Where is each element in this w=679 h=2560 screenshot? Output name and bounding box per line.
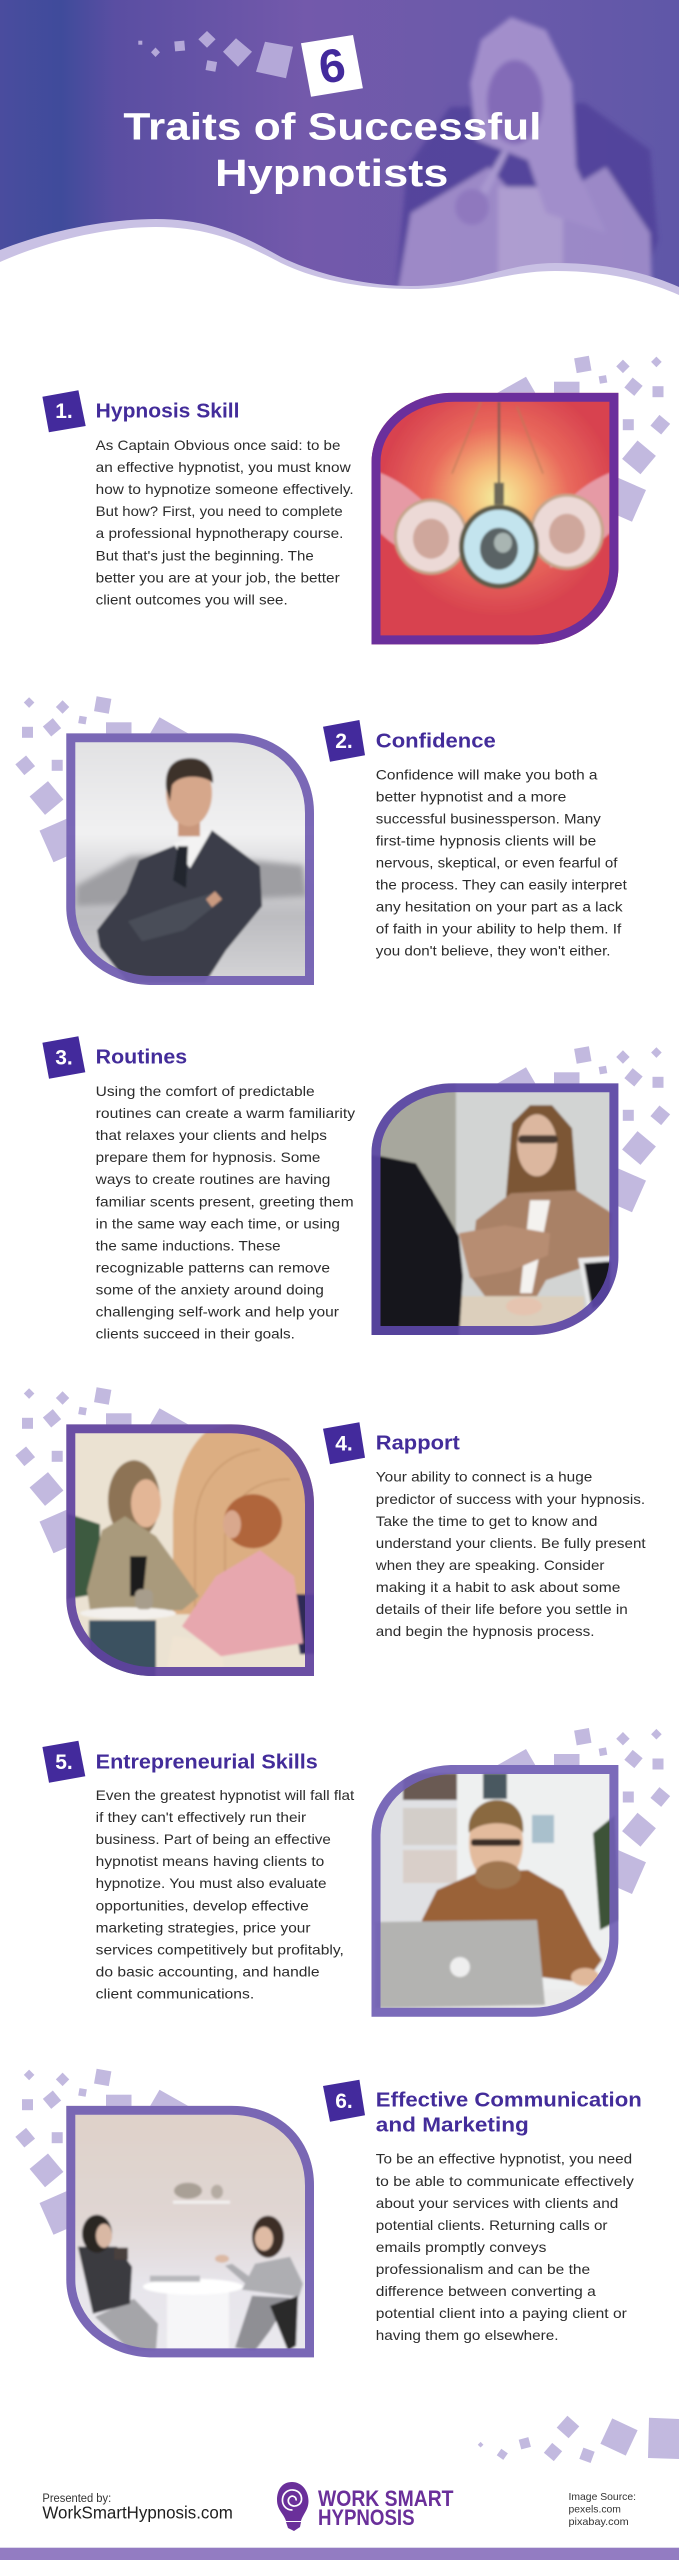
body text: As Captain Obvious once said: to be: [96, 437, 341, 453]
body text: having them go elsewhere.: [376, 2327, 558, 2343]
body text: business. Part of being an effective: [96, 1831, 331, 1847]
body text: how to hypnotize someone effectively.: [96, 481, 354, 497]
header portrait of woman: [396, 17, 658, 290]
body text: routines can create a warm familiarity: [96, 1105, 355, 1121]
body text: recognizable patterns can remove: [96, 1259, 330, 1275]
body text: Your ability to connect is a huge: [376, 1469, 593, 1485]
body text: [376, 2151, 634, 2343]
body text: [95, 1083, 355, 1342]
body text: the process. They can easily interpret: [376, 877, 627, 893]
title: Hypnotists: [215, 153, 448, 195]
title number card: [301, 35, 363, 97]
heading: Hypnosis Skill: [96, 401, 240, 423]
presented by credit: Presented by:: [42, 2493, 111, 2505]
body text: when they are speaking. Consider: [375, 1557, 605, 1573]
number badge 6: [323, 2080, 365, 2122]
heading: Rapport: [376, 1433, 460, 1455]
panel: 2 confidence: [15, 696, 627, 990]
body text: an effective hypnotist, you must know: [96, 459, 352, 475]
body text: the same inductions. These: [96, 1237, 281, 1253]
body text: that relaxes your clients and helps: [96, 1127, 327, 1143]
body text: difference between converting a: [376, 2283, 596, 2299]
number badge 3: [42, 1036, 85, 1079]
number badge 2: 2.: [335, 730, 353, 753]
header decorative squares: [138, 31, 293, 78]
panel: 6 effective communication and marketing: [15, 2069, 642, 2363]
image source credit: pixabay.com: [568, 2516, 629, 2528]
body text: predictor of success with your hypnosis.: [376, 1491, 645, 1507]
heading: and Marketing: [376, 2115, 529, 2137]
heading: Routines: [96, 1047, 187, 1069]
body text: client communications.: [96, 1986, 254, 2002]
body text: services competitively but profitably,: [96, 1941, 344, 1957]
heading: Confidence: [376, 731, 496, 753]
body text: prepare them for hypnosis. Some: [96, 1149, 321, 1165]
body text: making it a habit to ask about some: [376, 1579, 621, 1595]
heading: Effective Communication: [376, 2090, 642, 2112]
body text: ways to create routines are having: [95, 1171, 330, 1187]
heading: Entrepreneurial Skills: [96, 1751, 318, 1773]
body text: clients succeed in their goals.: [96, 1326, 295, 1342]
body text: [96, 1787, 354, 2002]
number badge 3: 3.: [55, 1046, 73, 1070]
body text: Using the comfort of predictable: [96, 1083, 315, 1099]
photo: man in a suit with crossed arms: [60, 728, 320, 990]
image source credit: [568, 2491, 636, 2528]
body text: opportunities, develop effective: [96, 1897, 309, 1913]
body text: professionalism and can be the: [376, 2261, 590, 2277]
body text: hypnotist means having clients to: [96, 1853, 325, 1869]
body text: in the same way each time, or using: [96, 1215, 340, 1231]
body text: Take the time to get to know and: [376, 1513, 598, 1529]
body text: Confidence will make you both a: [376, 766, 598, 782]
body text: successful businessperson. Many: [376, 810, 601, 826]
wave lilac band: [0, 219, 679, 310]
body text: familiar scents present, greeting them: [96, 1193, 354, 1209]
panel: 3 routines: [42, 1036, 670, 1342]
heading: [376, 2090, 642, 2137]
body text: But how? First, you need to complete: [96, 503, 343, 519]
decorative squares: [487, 356, 670, 522]
body text: better hypnotist and a more: [376, 788, 567, 804]
photo: smiling man at a laptop: [365, 1760, 625, 2022]
number badge 5: [42, 1741, 85, 1783]
header banner: [0, 0, 679, 320]
wave white edge: [0, 227, 679, 320]
title: Traits of Successful: [123, 106, 541, 148]
body text: [96, 437, 354, 607]
photo: pocket watches on red background: [365, 388, 625, 650]
logo: work smart hypnosis: [277, 2482, 454, 2531]
body text: [375, 1469, 646, 1639]
body text: challenging self-work and help your: [96, 1304, 339, 1320]
panel: 5 entrepreneurial skills: [42, 1728, 670, 2022]
body text: and begin the hypnosis process.: [376, 1623, 594, 1639]
panel: 1 hypnosis skill: [42, 356, 670, 650]
photo: two women at a white table: [60, 2101, 320, 2363]
body text: But that's just the beginning. The: [96, 547, 314, 563]
body text: nervous, skeptical, or even fearful of: [376, 854, 618, 870]
body text: you don't believe, they won't either.: [376, 943, 610, 959]
body text: potential client into a paying client or: [376, 2305, 627, 2321]
number badge 5: 5.: [55, 1751, 73, 1774]
body text: any hesitation on your part as a lack: [376, 899, 624, 915]
decorative squares: [487, 1046, 670, 1212]
body text: of faith in your ability to help them. If: [376, 921, 621, 937]
body text: Even the greatest hypnotist will fall flat: [96, 1787, 354, 1803]
body text: marketing strategies, price your: [96, 1919, 311, 1935]
number badge 1: [42, 390, 86, 432]
photo: handshake with woman in glasses: [365, 1078, 626, 1340]
panel: 4 rapport: [15, 1387, 646, 1681]
number badge 4: [323, 1422, 365, 1464]
number badge 1: 1.: [55, 400, 73, 423]
logo wordmark: HYPNOSIS: [318, 2505, 415, 2530]
number badge 2: [323, 720, 365, 762]
image source credit: Image Source:: [568, 2491, 636, 2503]
body text: details of their life before you settle in: [376, 1601, 628, 1617]
body text: understand your clients. Be fully present: [376, 1535, 646, 1551]
logo wordmark: WORK SMART: [318, 2486, 454, 2511]
icon: spiral light bulb: [277, 2482, 308, 2531]
presented by credit: [42, 2493, 233, 2522]
body text: some of the anxiety around doing: [96, 1282, 324, 1298]
header background gradient: [0, 0, 679, 300]
bottom bar: [0, 2548, 679, 2560]
body text: client outcomes you will see.: [96, 591, 288, 607]
decorative squares: [487, 1728, 670, 1894]
image source credit: pexels.com: [568, 2504, 621, 2516]
body text: do basic accounting, and handle: [96, 1963, 320, 1979]
logo wordmark: [318, 2486, 454, 2530]
body text: hypnotize. You must also evaluate: [96, 1875, 327, 1891]
decorative squares: [15, 696, 198, 862]
body text: to be able to communicate effectively: [376, 2173, 634, 2189]
body text: [376, 766, 627, 959]
title number card: 6: [315, 37, 349, 94]
presented by credit: WorkSmartHypnosis.com: [42, 2502, 233, 2522]
body text: if they can't effectively run their: [96, 1809, 306, 1825]
body text: first-time hypnosis clients will be: [376, 832, 596, 848]
photo: two women talking by a tan pod: [60, 1419, 320, 1681]
number badge 6: 6.: [335, 2090, 353, 2113]
body text: better you are at your job, the better: [96, 569, 340, 585]
body text: potential clients. Returning calls or: [376, 2217, 608, 2233]
number badge 4: 4.: [335, 1432, 353, 1456]
body text: emails promptly conveys: [376, 2239, 546, 2255]
body text: a professional hypnotherapy course.: [96, 525, 343, 541]
body text: To be an effective hypnotist, you need: [376, 2151, 632, 2167]
decorative squares: [15, 1387, 198, 1553]
footer decorative squares: [478, 2416, 679, 2463]
decorative squares: [15, 2069, 198, 2235]
title: [123, 106, 541, 195]
body text: about your services with clients and: [376, 2195, 618, 2211]
